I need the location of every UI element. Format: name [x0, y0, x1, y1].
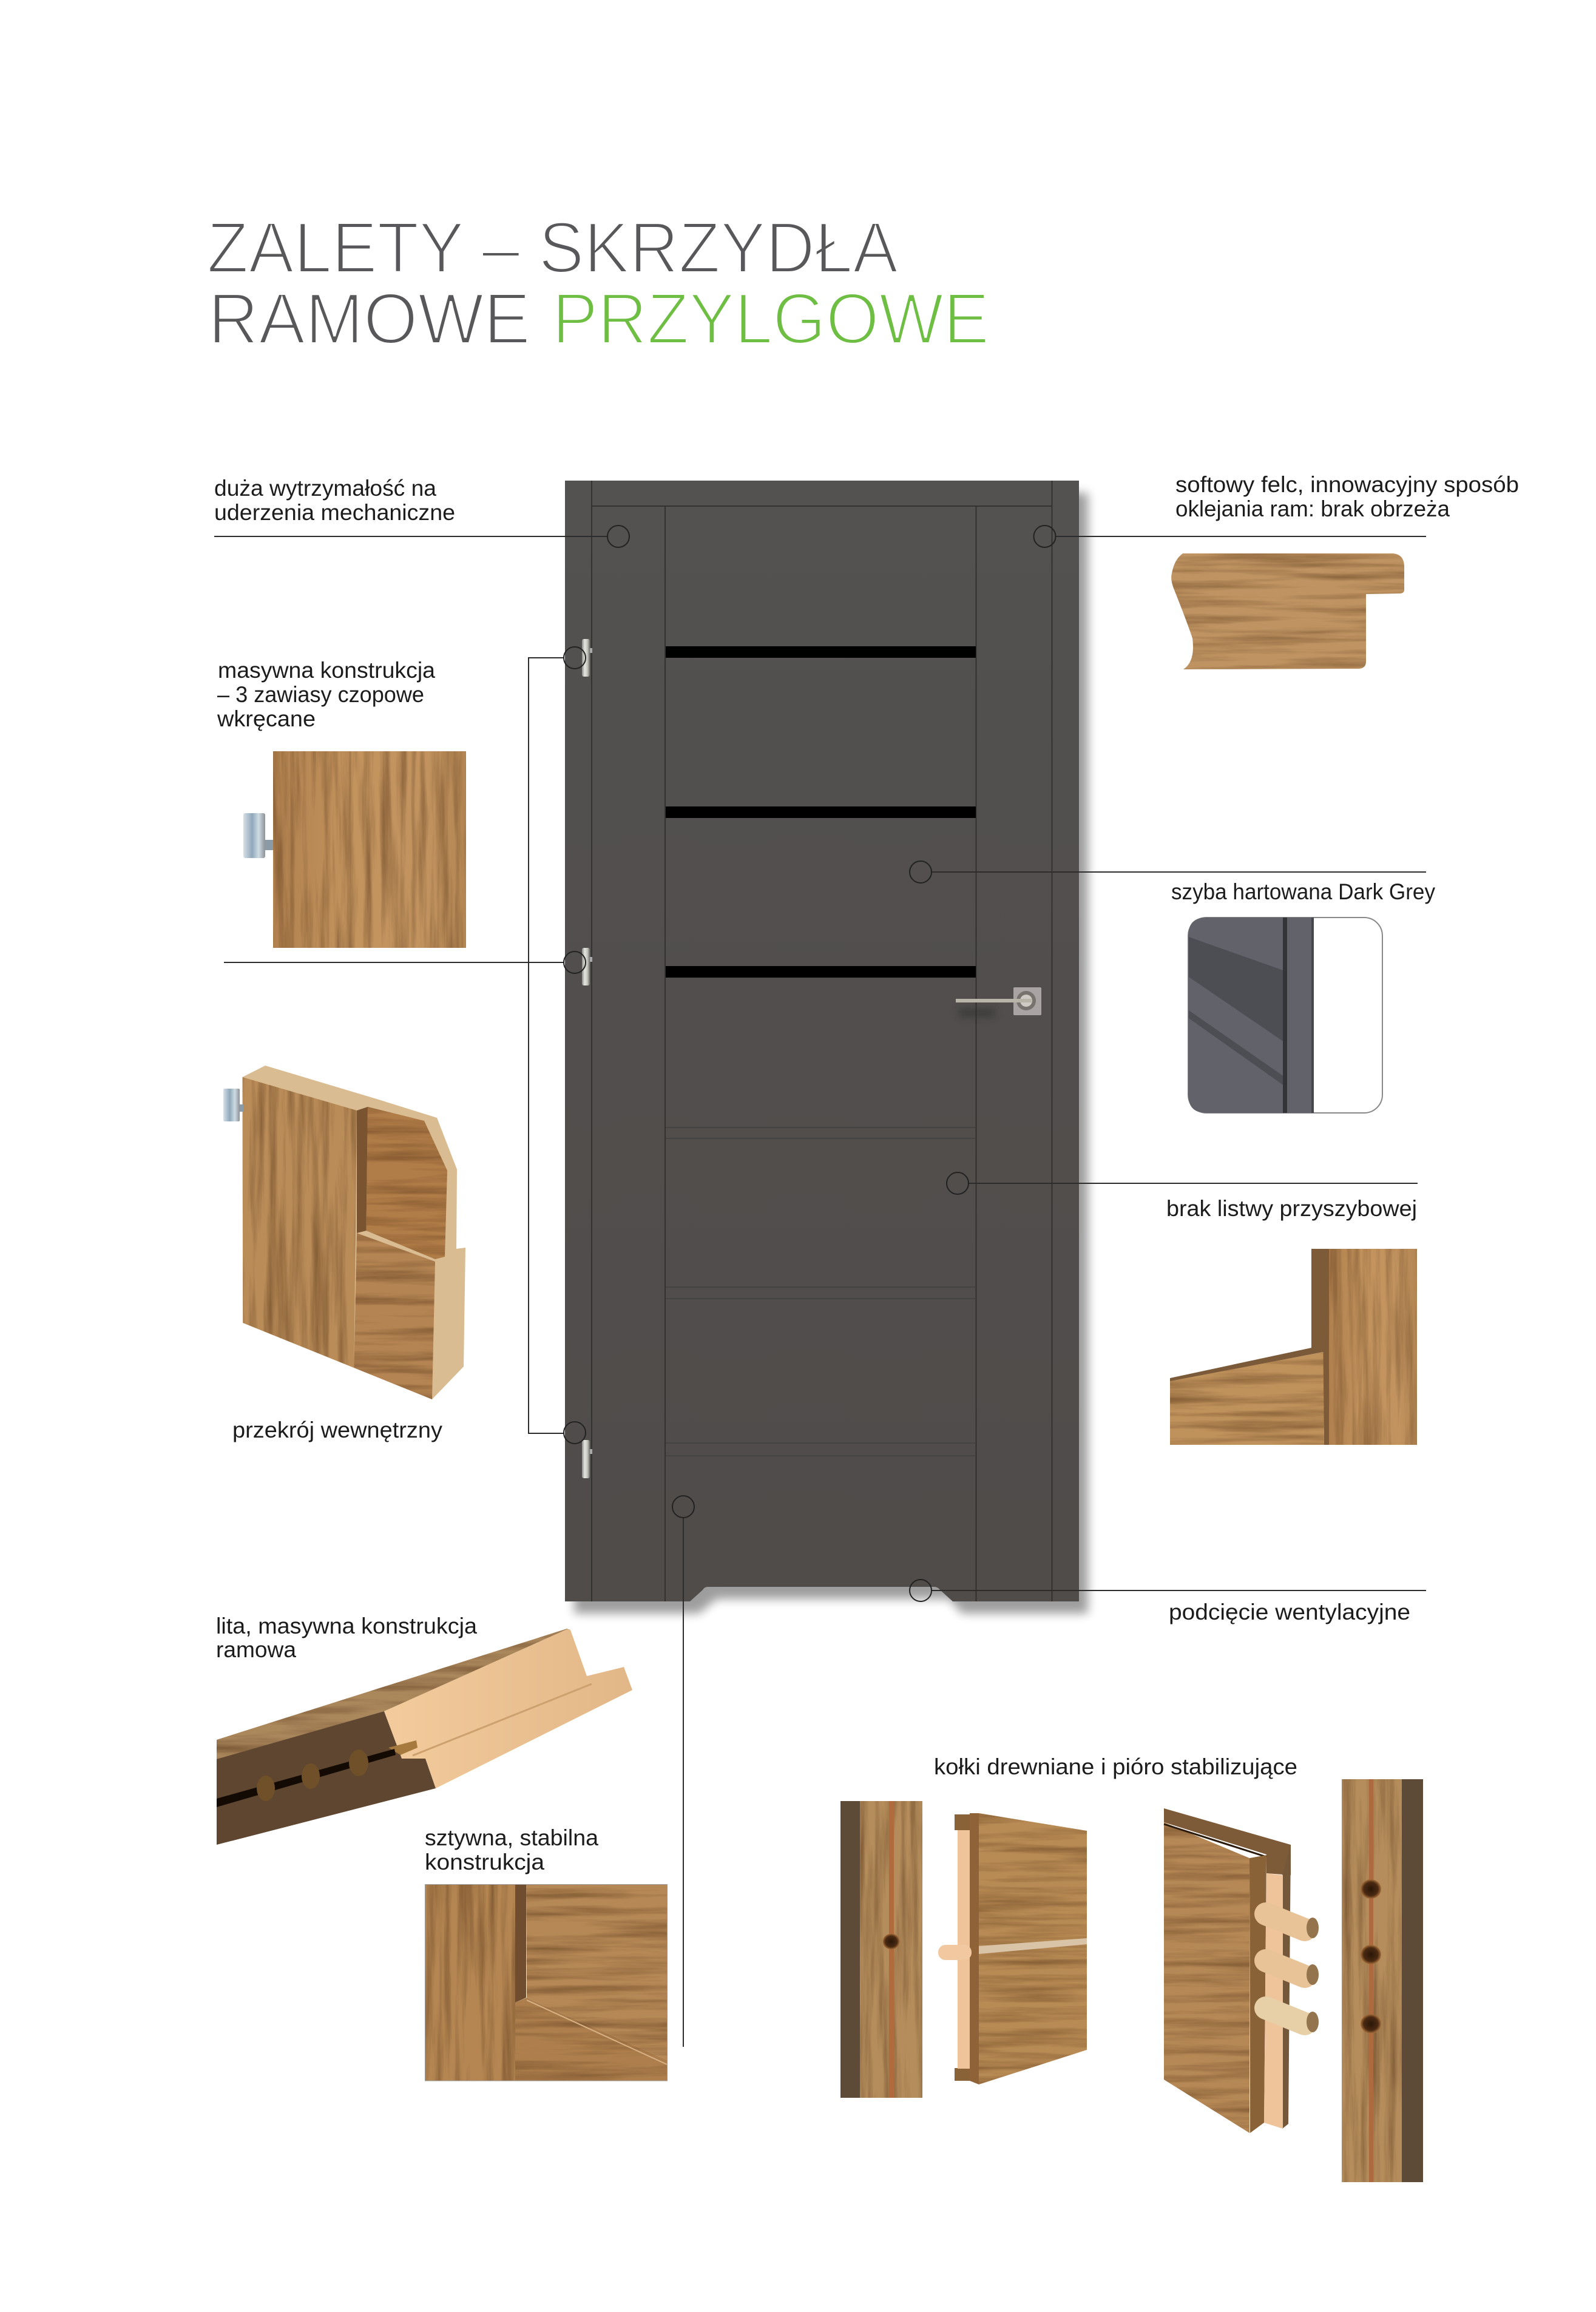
dowel 2: [1266, 1961, 1319, 1985]
label: stiff construction: sztywna, stabilna: [425, 1825, 598, 1850]
recess strip: [1311, 1249, 1329, 1445]
tongue line: [1369, 1779, 1373, 2182]
label: soft rebate: [1175, 472, 1519, 521]
hinge top: [582, 639, 592, 677]
label: massive construction hinges: – 3 zawiasy czopowe: [217, 682, 424, 707]
image: no glazing bead: [1170, 1249, 1417, 1445]
dowel: [938, 1945, 972, 1960]
glass strip 3: [666, 966, 976, 978]
reflection band: [1189, 937, 1283, 1041]
dark glass: [1188, 918, 1314, 1113]
image: glass swatch: [1188, 918, 1382, 1113]
side edge: [970, 1813, 979, 2084]
image: hinge on wood: [243, 751, 466, 948]
image: solid frame rail: [217, 1629, 632, 1845]
label: ventilation undercut: podcięcie wentylacyjne: [1169, 1600, 1410, 1624]
mdf core: [243, 1066, 465, 1399]
dark side face: [217, 1711, 436, 1845]
label: solid frame: lita, masywna konstrukcja: [216, 1614, 477, 1638]
tan tongue slit: [388, 1740, 418, 1755]
image: right edge strip: [1342, 1779, 1423, 2182]
label: massive construction hinges: [217, 658, 435, 731]
image: panel with single dowel: [938, 1813, 1087, 2084]
glue strip: [979, 1938, 1087, 1954]
top profile: [1164, 1808, 1291, 1875]
recess: [515, 1885, 526, 2003]
label: massive construction hinges: masywna konstrukcja: [218, 658, 435, 683]
reflection line: [1189, 1010, 1283, 1085]
dark rear edge: [1282, 1845, 1291, 2129]
title line 1: ZALETY – SKRZYDŁA: [207, 208, 899, 288]
door shadow: [574, 493, 1088, 1614]
door body: [565, 481, 1079, 1601]
groove ends: [955, 1814, 970, 2081]
image border: [425, 1885, 668, 2081]
side edge: [1249, 1855, 1266, 2133]
label: massive construction hinges: wkręcane: [217, 706, 316, 731]
mdf tongue: [958, 1830, 970, 2069]
lower panel veneer: [354, 1233, 435, 1399]
label: dowels and tongue: kołki drewniane i pióro stabilizujące: [934, 1754, 1297, 1779]
veneer face: [979, 1813, 1087, 2084]
veneer face: [1164, 1822, 1249, 2133]
glass strip 2: [666, 806, 976, 818]
post: [1329, 1249, 1417, 1445]
title: [207, 208, 989, 359]
image: internal cross section: [223, 1066, 465, 1399]
label: soft rebate: oklejania ram: brak obrzeża: [1175, 496, 1450, 521]
label: solid frame: [216, 1614, 477, 1662]
dowel holes: [1361, 1879, 1381, 2033]
veneer: [1342, 1779, 1402, 2182]
swatch outline: [1188, 918, 1382, 1113]
image: rebate profile: [1171, 553, 1404, 669]
label: stiff construction: [425, 1825, 598, 1874]
tongue line: [889, 1801, 894, 2098]
upper panel: [526, 1885, 668, 2060]
title line 2 grey: RAMOWE: [208, 279, 530, 359]
title line 2 green: PRZYLGOWE: [552, 279, 989, 359]
marker: ventilation undercut: [910, 1580, 1426, 1601]
image: stiff construction: [425, 1885, 668, 2081]
marker: impact resistance: [214, 526, 629, 547]
label: tempered glass: szyba hartowana Dark Grey: [1171, 879, 1435, 904]
callout connector lines and markers: [214, 526, 1426, 2047]
door handle: [956, 987, 1041, 1017]
label: impact resistance: [214, 476, 455, 525]
marker: tempered glass: [910, 861, 1426, 883]
upper panel veneer: [367, 1107, 447, 1259]
label: impact resistance: uderzenia mechaniczne: [214, 500, 455, 525]
dark side: [1402, 1779, 1423, 2182]
hinge middle: [582, 948, 592, 985]
marker: stiff construction: [672, 1496, 694, 2047]
panel edge: [1170, 1348, 1323, 1382]
veneer: [860, 1801, 922, 2098]
lower panel: [1170, 1352, 1324, 1445]
image: left edge strip: [840, 1801, 922, 2098]
dowel 3: [1266, 2008, 1319, 2032]
wood panel: [273, 751, 466, 948]
label: internal cross section: przekrój wewnętrzny: [232, 1418, 443, 1442]
mdf tongue: [1264, 1873, 1283, 2129]
dowel hole: [883, 1933, 900, 1949]
dowel holes: [257, 1749, 368, 1801]
small hinge: [223, 1089, 243, 1121]
mdf profile: [384, 1629, 632, 1788]
front veneer: [243, 1077, 357, 1368]
glass strip 1: [666, 646, 976, 658]
label: stiff construction: konstrukcja: [425, 1850, 544, 1874]
image: panel with three dowels: [1164, 1808, 1319, 2133]
frame strip: [1283, 918, 1287, 1113]
dark side: [840, 1801, 860, 2098]
slit: [217, 1749, 396, 1807]
label: impact resistance: duża wytrzymałość na: [214, 476, 436, 501]
marker: hinges bracket: [224, 647, 586, 1444]
top wood face: [217, 1629, 570, 1760]
hinge cylinder: [243, 813, 273, 858]
label: soft rebate: softowy felc, innowacyjny sposób: [1175, 472, 1519, 497]
door leaf: [565, 481, 1079, 1601]
hinge bottom: [582, 1440, 592, 1478]
post: [425, 1885, 516, 2081]
label: no glazing bead: brak listwy przyszybowej: [1166, 1196, 1417, 1221]
label: solid frame: ramowa: [216, 1637, 296, 1662]
marker: soft rebate: [1034, 526, 1426, 547]
dowel 1: [1266, 1914, 1319, 1938]
recess shadow: [357, 1107, 368, 1233]
marker: no glazing bead: [947, 1172, 1418, 1194]
lower panel: [515, 1998, 668, 2081]
